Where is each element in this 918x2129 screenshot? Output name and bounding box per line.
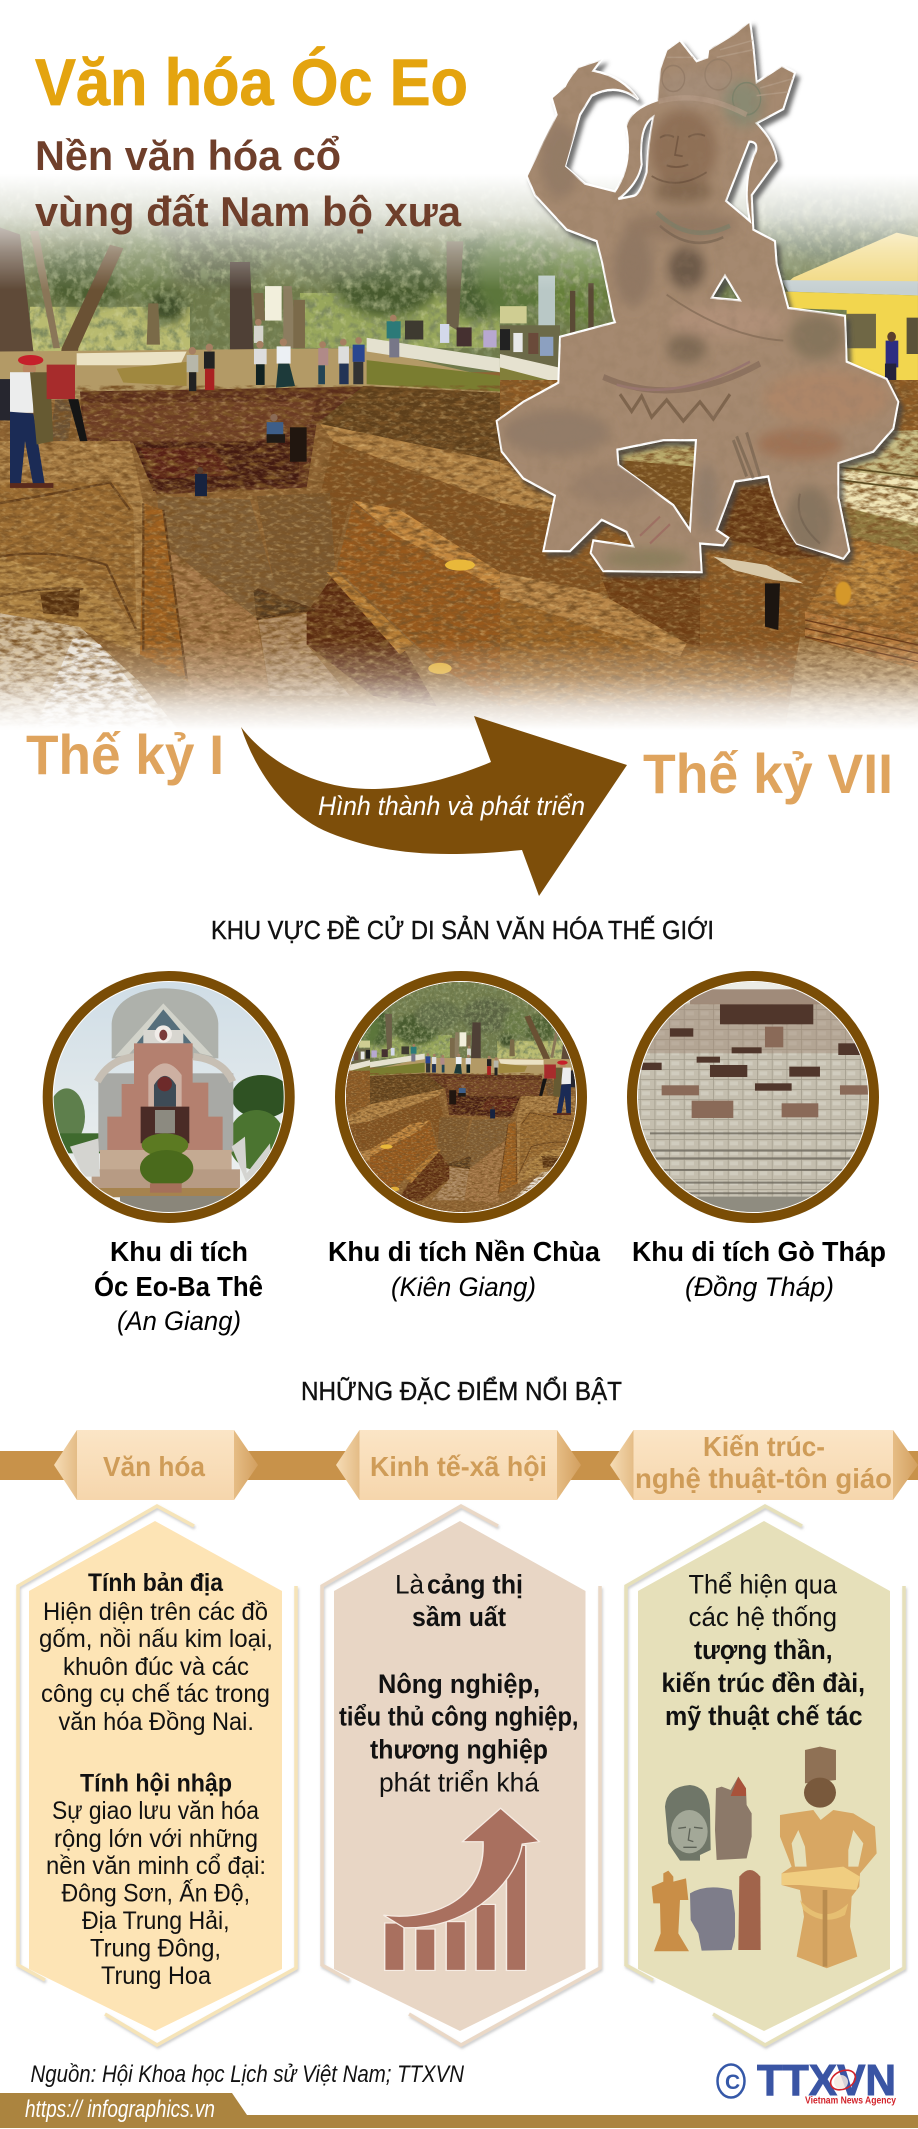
text: integration character: Trung Đông, — [90, 1934, 221, 1962]
panel: economy and society — [322, 1506, 600, 2045]
text: integration character — [46, 1770, 266, 1990]
ring frame — [632, 976, 874, 1218]
subtitle — [35, 132, 462, 235]
photo: Go Thap brick foundations — [638, 982, 868, 1212]
hexagon frame — [322, 1506, 600, 2045]
hero photo: excavation site with fading edges — [0, 0, 918, 760]
site name: Khu di tích Gò Tháp — [632, 1236, 886, 1267]
artefact: linga stele — [738, 1870, 761, 1950]
text: indigenous character — [39, 1569, 273, 1736]
logo: TTXVN: Vietnam News Agency — [805, 2094, 896, 2106]
text: expressed through — [662, 1570, 865, 1731]
logo: TTXVN: TTXVN — [757, 2056, 896, 2105]
text: port and trade: thương nghiệp — [370, 1734, 548, 1764]
text: port and trade: Là — [395, 1570, 425, 1600]
banner: architecture, art, religion — [610, 1430, 918, 1500]
footer bar with URL: https:// infographics.vn — [25, 2096, 215, 2123]
text: expressed through: tượng thần, — [694, 1635, 832, 1665]
banner: economy and society: Kinh tế-xã hội — [370, 1451, 547, 1482]
site name: (Kiên Giang) — [391, 1272, 536, 1302]
century label: end: Thế kỷ VII — [643, 742, 893, 805]
text: indigenous character: văn hóa Đồng Nai. — [58, 1708, 254, 1736]
connecting band — [0, 1451, 918, 1480]
statue cut-out — [493, 19, 910, 578]
title: Văn hóa Óc Eo — [35, 45, 468, 119]
banner: culture — [54, 1430, 258, 1500]
text: expressed through: kiến trúc đền đài, — [662, 1668, 865, 1698]
text: indigenous character: Tính bản địa — [88, 1569, 224, 1597]
hexagon frame — [626, 1506, 904, 2045]
text: integration character: rộng lớn với những — [54, 1825, 258, 1853]
panel: culture — [18, 1506, 296, 2045]
necklace, arm and skirt detail — [603, 212, 820, 543]
text: integration character: Trung Hoa — [101, 1962, 211, 1990]
crown detail — [658, 40, 793, 115]
ring frame — [48, 976, 290, 1218]
banner: architecture, art, religion: nghệ thuật-tôn giáo — [635, 1463, 892, 1494]
photo: Nen Chua excavation — [346, 982, 576, 1212]
face detail — [652, 134, 707, 183]
text: indigenous character: công cụ chế tác trong — [41, 1680, 270, 1708]
artefact images — [652, 1747, 877, 1968]
text: expressed through: mỹ thuật chế tác — [665, 1701, 862, 1731]
subtitle: vùng đất Nam bộ xưa — [35, 188, 462, 235]
site name: Óc Eo-Ba Thê — [94, 1271, 263, 1302]
text: indigenous character: Hiện diện trên các đồ — [43, 1598, 268, 1626]
text: indigenous character: gốm, nồi nấu kim loại, — [39, 1625, 273, 1653]
arrow: formation and development: Hình thành và phát triển — [318, 791, 585, 821]
text: port and trade: sầm uất — [412, 1602, 506, 1632]
text: indigenous character: khuôn đúc và các — [63, 1653, 249, 1681]
text: integration character: Địa Trung Hải, — [82, 1907, 230, 1935]
text: port and trade: tiểu thủ công nghiệp, — [339, 1702, 578, 1732]
heading: nominated heritage areas: KHU VỰC ĐỀ CỬ DI SẢN VĂN HÓA THẾ GIỚI — [211, 914, 714, 945]
banner: architecture, art, religion: Kiến trúc- — [703, 1431, 825, 1462]
site name — [632, 1236, 886, 1302]
ring frame — [340, 976, 582, 1218]
site name: (An Giang) — [117, 1306, 241, 1336]
banner: economy and society — [336, 1430, 581, 1500]
panel: architecture, art, religion — [626, 1506, 904, 2045]
text: integration character: Tính hội nhập — [80, 1770, 232, 1798]
text: expressed through: các hệ thống — [688, 1602, 837, 1632]
text: integration character: nền văn minh cổ đại: — [46, 1852, 266, 1880]
hexagon frame — [18, 1506, 296, 2045]
text: port and trade: cảng thị — [427, 1570, 523, 1600]
heading: outstanding features: NHỮNG ĐẶC ĐIỂM NỔI BẬT — [301, 1376, 622, 1406]
source line: Nguồn: Hội Khoa học Lịch sử Việt Nam; TTXVN — [30, 2061, 465, 2088]
artefact: stone head — [665, 1785, 711, 1861]
site name — [94, 1236, 263, 1336]
text: port and trade — [339, 1570, 578, 1798]
site: Nen Chua — [330, 971, 600, 1302]
artefact: dancer figure — [652, 1871, 689, 1951]
logo: TTXVN: C — [725, 2071, 740, 2094]
photo: Oc Eo temple — [43, 980, 292, 1217]
artefact: large standing statue — [780, 1747, 877, 1968]
site name: Khu di tích — [110, 1236, 248, 1267]
text: integration character: Đông Sơn, Ấn Độ, — [62, 1878, 250, 1908]
icon: rising bar chart with arrow — [384, 1808, 539, 1970]
century label: start: Thế kỷ I — [26, 723, 224, 786]
banner: culture: Văn hóa — [103, 1451, 205, 1482]
text: expressed through: Thể hiện qua — [688, 1570, 838, 1600]
subtitle: Nền văn hóa cổ — [35, 132, 341, 179]
artefact: stone stele — [690, 1887, 735, 1951]
site name: Khu di tích Nền Chùa — [328, 1236, 600, 1267]
site: Go Thap — [630, 976, 886, 1302]
site name: (Đồng Tháp) — [685, 1272, 834, 1302]
site name — [328, 1236, 600, 1302]
artefact: small deity — [715, 1777, 752, 1860]
text: port and trade: phát triển khá — [379, 1768, 540, 1798]
footer bar with URL — [0, 2093, 918, 2128]
site: Oc Eo-Ba The — [43, 976, 292, 1336]
text: integration character: Sự giao lưu văn hóa — [52, 1797, 259, 1825]
arrow: formation and development — [241, 716, 627, 896]
text: port and trade: Nông nghiệp, — [378, 1669, 540, 1699]
